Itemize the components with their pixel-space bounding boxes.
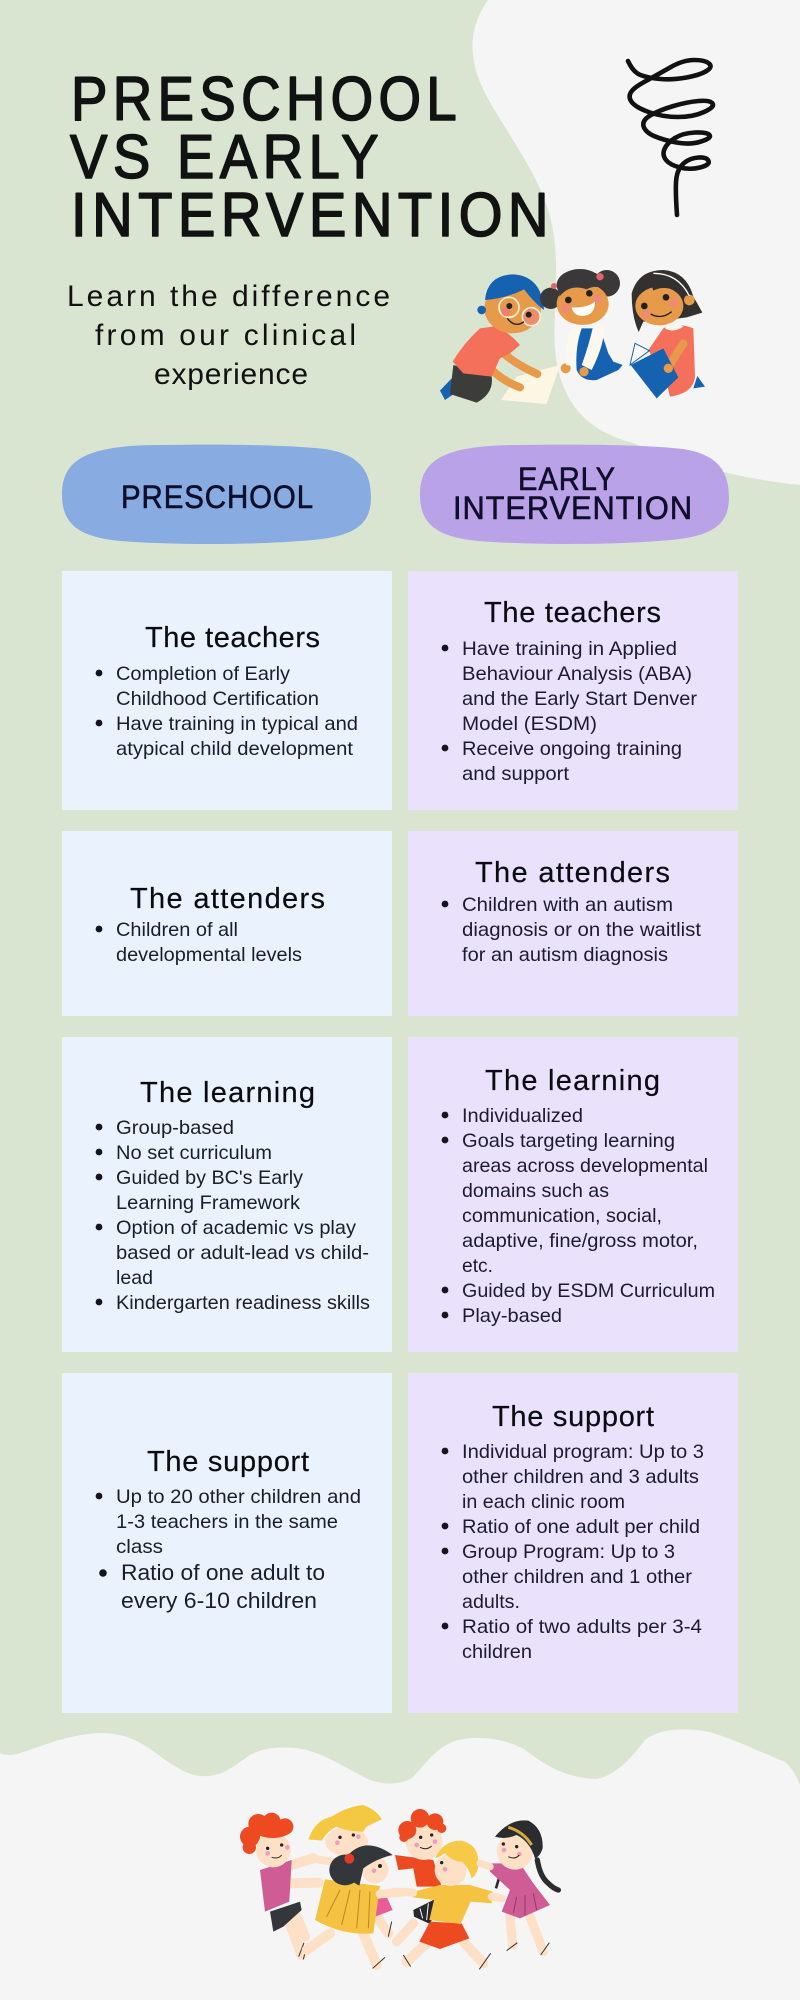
boy with glasses bbox=[440, 274, 544, 403]
panel: early intervention learning: etc. bbox=[462, 1255, 493, 1277]
panel: preschool learning: The learning bbox=[140, 1077, 315, 1109]
child: blonde pigtails bbox=[308, 1805, 382, 1862]
pill: early intervention bbox=[420, 445, 729, 544]
illustration: three children reading bbox=[440, 269, 705, 404]
panel: preschool learning: lead bbox=[116, 1267, 153, 1289]
panel: early intervention support: in each clinic room bbox=[462, 1491, 625, 1513]
panel: preschool support: Up to 20 other children and bbox=[116, 1486, 361, 1508]
panel: preschool support: Ratio of one adult to bbox=[121, 1560, 325, 1585]
panel: early intervention teachers bbox=[408, 571, 738, 810]
panel: early intervention learning: communication, social, bbox=[462, 1205, 662, 1227]
panel: early intervention support: Individual program: Up to 3 bbox=[462, 1441, 704, 1463]
panel: early intervention teachers: and the Early Start Denver bbox=[462, 688, 698, 710]
panel: early intervention support: The support bbox=[492, 1401, 654, 1433]
panel: early intervention teachers: Have training in Applied bbox=[462, 638, 677, 660]
child: braid, pink dress bbox=[480, 1820, 558, 1955]
pill: early intervention: EARLY bbox=[518, 461, 616, 497]
panel: preschool learning: based or adult-lead vs child- bbox=[116, 1242, 369, 1264]
pill: early intervention: INTERVENTION bbox=[453, 490, 693, 526]
child: blond hair, yellow shirt, red shorts bbox=[395, 1841, 502, 1969]
panel: preschool teachers: Completion of Early bbox=[116, 663, 290, 685]
panel: preschool learning: No set curriculum bbox=[116, 1142, 272, 1164]
panel: early intervention support: Ratio of two adults per 3-4 bbox=[462, 1616, 702, 1638]
panel: preschool attenders: The attenders bbox=[130, 883, 325, 915]
panel: early intervention learning: Play-based bbox=[462, 1305, 562, 1327]
girl with book bbox=[630, 270, 705, 398]
panel: early intervention learning: Guided by ESDM Curriculum bbox=[462, 1280, 715, 1302]
title bbox=[70, 65, 554, 250]
subtitle: from our clinical bbox=[95, 319, 356, 352]
girl with buns bbox=[540, 269, 623, 380]
panel: early intervention teachers: Model (ESDM) bbox=[462, 713, 597, 735]
illustration: children playing in a circle bbox=[240, 1805, 558, 1969]
panel: early intervention support: other children and 3 adults bbox=[462, 1466, 699, 1488]
panel: early intervention teachers: Receive ongoing training bbox=[462, 738, 682, 760]
panel: early intervention attenders: for an autism diagnosis bbox=[462, 944, 668, 966]
subtitle: Learn the difference bbox=[67, 280, 390, 313]
panel: preschool attenders: developmental levels bbox=[116, 944, 302, 966]
panel: early intervention support: other children and 1 other bbox=[462, 1566, 693, 1588]
panel: early intervention attenders bbox=[408, 831, 738, 1016]
pill: preschool bbox=[62, 445, 371, 544]
panel: preschool teachers bbox=[62, 571, 392, 810]
panel: early intervention attenders: diagnosis or on the waitlist bbox=[462, 919, 702, 941]
panel: early intervention attenders: The attenders bbox=[475, 857, 670, 889]
subtitle bbox=[67, 280, 390, 391]
panel: preschool learning: Group-based bbox=[116, 1117, 234, 1139]
panel: early intervention learning: Goals targeting learning bbox=[462, 1130, 675, 1152]
panel: preschool learning: Option of academic vs play bbox=[116, 1217, 356, 1239]
panel: early intervention learning: The learning bbox=[485, 1065, 660, 1097]
background blob: top right bbox=[473, 0, 800, 485]
title: PRESCHOOL bbox=[71, 65, 462, 134]
panel: early intervention learning: Individualized bbox=[462, 1105, 583, 1127]
panel: preschool teachers: atypical child development bbox=[116, 738, 354, 760]
panel: preschool learning: Kindergarten readiness skills bbox=[116, 1292, 370, 1314]
panel: early intervention teachers: The teachers bbox=[484, 597, 661, 629]
panel: preschool support bbox=[62, 1373, 392, 1713]
panel: preschool support: class bbox=[116, 1536, 163, 1558]
panel: preschool teachers: Have training in typical and bbox=[116, 713, 358, 735]
panel: preschool attenders: Children of all bbox=[116, 919, 238, 941]
panel: early intervention support: Group Program: Up to 3 bbox=[462, 1541, 675, 1563]
child: dark hair, yellow dress bbox=[307, 1845, 405, 1968]
panel: early intervention support: Ratio of one adult per child bbox=[462, 1516, 700, 1538]
panel: early intervention learning: adaptive, fine/gross motor, bbox=[462, 1230, 698, 1252]
panel: preschool teachers: The teachers bbox=[145, 622, 320, 654]
panel: early intervention support bbox=[408, 1373, 738, 1713]
panel: early intervention teachers: Behaviour Analysis (ABA) bbox=[462, 663, 692, 685]
panel: early intervention learning: domains such as bbox=[462, 1180, 609, 1202]
panel: early intervention learning bbox=[408, 1037, 738, 1352]
paper bbox=[501, 365, 560, 404]
child: red hair, striped skirt bbox=[395, 1809, 446, 1942]
panel: preschool support: The support bbox=[147, 1446, 309, 1478]
panel: preschool support: 1-3 teachers in the same bbox=[116, 1511, 338, 1533]
subtitle: experience bbox=[154, 358, 308, 391]
pill: preschool: PRESCHOOL bbox=[121, 479, 314, 515]
background wave: bottom bbox=[0, 1729, 800, 2000]
title: VS EARLY bbox=[70, 123, 384, 192]
panel: early intervention support: adults. bbox=[462, 1591, 520, 1613]
title: INTERVENTION bbox=[71, 181, 554, 250]
icon: black spiral squiggle bbox=[628, 60, 713, 215]
panel: early intervention support: children bbox=[462, 1641, 532, 1663]
panel: early intervention teachers: and support bbox=[462, 763, 570, 785]
panel: preschool learning: Guided by BC's Early bbox=[116, 1167, 303, 1189]
panel: preschool learning: Learning Framework bbox=[116, 1192, 300, 1214]
panel: early intervention learning: areas across developmental bbox=[462, 1155, 708, 1177]
panel: preschool support: every 6-10 children bbox=[121, 1588, 317, 1613]
panel: early intervention attenders: Children with an autism bbox=[462, 894, 673, 916]
child: red curly hair, pink shirt bbox=[240, 1813, 318, 1959]
panel: preschool teachers: Childhood Certification bbox=[116, 688, 319, 710]
panel: preschool attenders bbox=[62, 831, 392, 1016]
panel: preschool learning bbox=[62, 1037, 392, 1352]
